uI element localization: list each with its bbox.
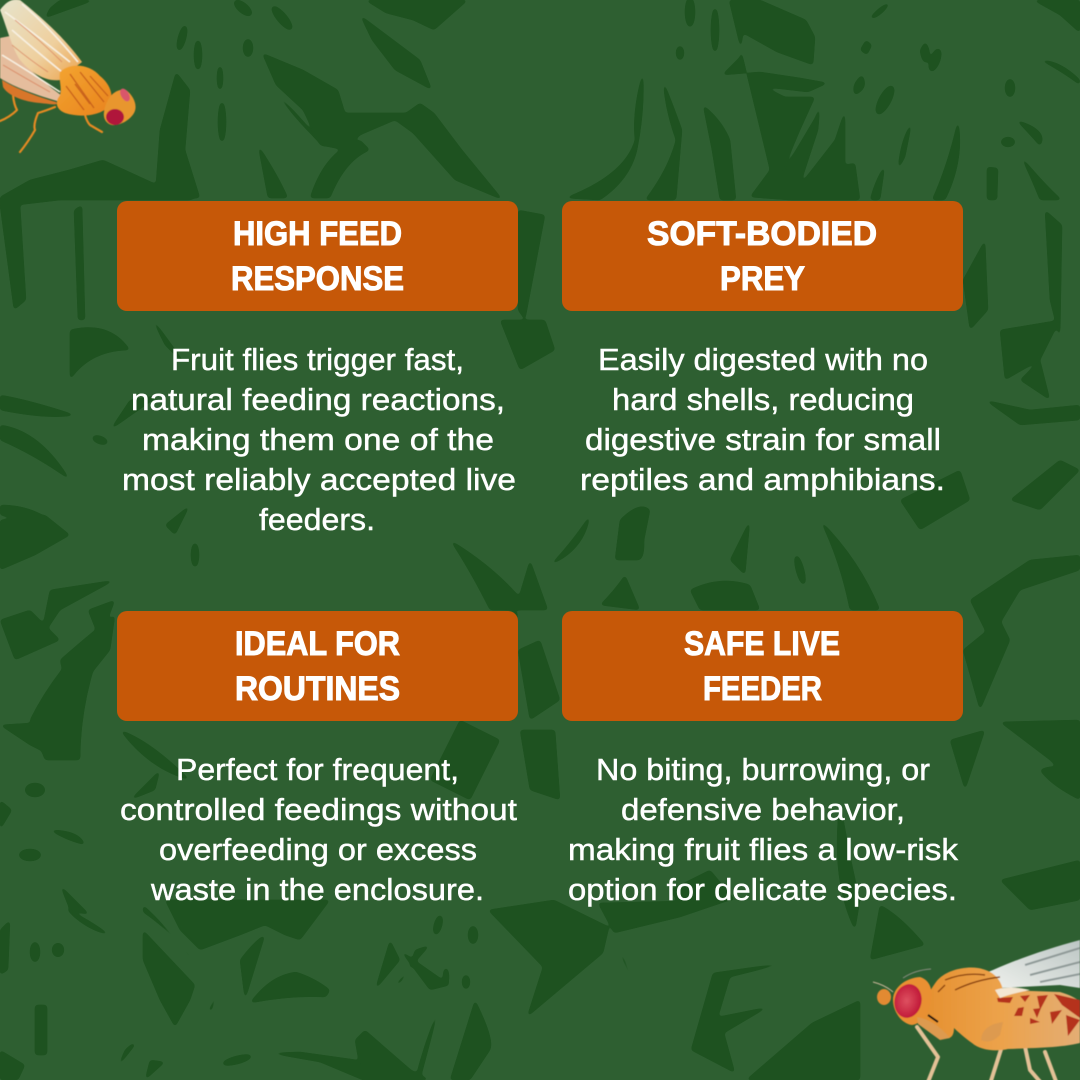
icon: fly legs — [917, 1023, 1057, 1080]
icon: fly head — [891, 977, 950, 1040]
body text: Fruit flies trigger fast, — [171, 342, 464, 377]
panel: safe live feeder — [562, 611, 963, 907]
icon: fly head — [104, 87, 136, 125]
body text: reptiles and amphibians. — [580, 462, 945, 497]
heading box: PREY — [720, 260, 805, 298]
icon: fly wings — [0, 0, 82, 101]
body text: Easily digested with no — [598, 342, 928, 377]
heading box — [562, 611, 963, 721]
heading box: FEEDER — [703, 670, 822, 708]
heading box: RESPONSE — [231, 260, 404, 298]
heading box: ROUTINES — [235, 670, 400, 708]
body text: feeders. — [259, 502, 375, 537]
icon: fruit fly bottom right — [873, 940, 1080, 1080]
body text: Perfect for frequent, — [176, 752, 459, 787]
panel: soft-bodied prey — [562, 201, 963, 497]
icon: fly thorax — [57, 66, 112, 116]
icon: fly body — [918, 968, 1080, 1050]
heading box: SAFE LIVE — [684, 625, 840, 663]
icon: fly legs — [0, 95, 102, 152]
body text: No biting, burrowing, or — [596, 752, 930, 787]
body text: natural feeding reactions, — [131, 382, 505, 417]
body text: overfeeding or excess — [159, 832, 477, 867]
icon: fly antenna — [873, 969, 931, 1005]
body text: making them one of the — [142, 422, 494, 457]
panel: high feed response — [117, 201, 518, 537]
heading box: SOFT-BODIED — [647, 215, 877, 253]
body text: controlled feedings without — [120, 792, 517, 827]
body text — [120, 752, 517, 907]
body text: defensive behavior, — [621, 792, 905, 827]
heading box — [117, 201, 518, 311]
panel: ideal for routines — [117, 611, 518, 907]
heading box — [117, 611, 518, 721]
body text: hard shells, reducing — [612, 382, 914, 417]
icon: fruit fly top left — [0, 0, 136, 152]
body text: digestive strain for small — [585, 422, 941, 457]
body text: most reliably accepted live — [122, 462, 516, 497]
heading box: IDEAL FOR — [235, 625, 400, 663]
body text — [568, 752, 959, 907]
body text — [580, 342, 945, 497]
heading box — [562, 201, 963, 311]
body text: option for delicate species. — [568, 872, 957, 907]
body text — [122, 342, 516, 537]
icon: fly abdomen — [2, 80, 57, 104]
icon: fly wing — [988, 940, 1080, 988]
body text: making fruit flies a low-risk — [568, 832, 959, 867]
heading box: HIGH FEED — [233, 215, 402, 253]
body text: waste in the enclosure. — [150, 872, 484, 907]
